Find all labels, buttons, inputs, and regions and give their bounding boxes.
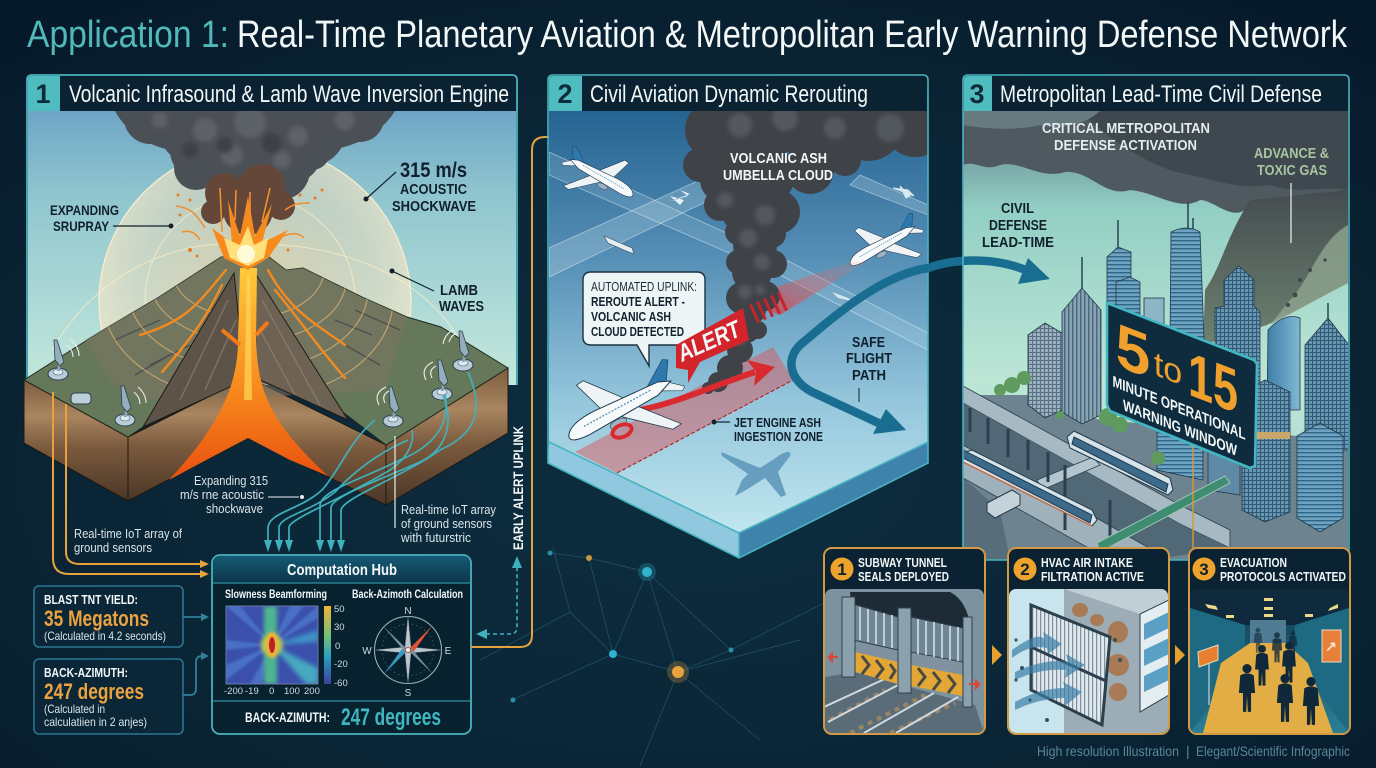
card 2: HVAC filtration: 2 [1020,560,1030,579]
volcanic ash plume [683,111,928,394]
alert banner: ALERT [673,315,747,368]
teal dashed uplink [486,566,517,634]
label: IoT array right: of ground sensors [401,516,492,531]
label: advance and toxic gas [1254,146,1329,243]
toxic cloud [963,111,1348,213]
slowness beamforming heatmap [224,589,348,697]
back-azimuth compass: E [445,646,452,657]
label: volcanic ash umbrella cloud: VOLCANIC ASH [730,151,827,167]
flight corridors [549,152,928,350]
label: safe flight path [846,334,892,402]
card 2: HVAC filtration: HVAC AIR INTAKE [1041,555,1133,570]
computation hub: Computation Hub [287,562,397,579]
lava conduit [169,268,328,480]
eruption [176,188,324,270]
label: civil defense lead-time [982,201,1054,251]
title: Application 1: [27,14,229,56]
label: jet engine ash ingestion zone [712,415,823,444]
back-azimuth compass: S [405,688,412,699]
plane shadow [721,452,791,497]
blast TNT yield box: (Calculated in 4.2 seconds) [44,629,166,643]
hub result: BACK-AZIMUTH: [245,709,330,725]
slowness beamforming heatmap: 30 [334,622,345,633]
scene: tunnel gate [824,589,984,733]
early alert uplink: EARLY ALERT UPLINK [510,426,526,550]
affected aircraft [549,341,700,473]
warning sign [1107,303,1257,468]
slowness beamforming heatmap: 0 [335,641,340,652]
scene: evacuation corridor [1190,589,1349,733]
slowness beamforming heatmap: 200 [304,686,320,697]
terrain side faces [24,380,128,501]
slowness beamforming heatmap: Slowness Beamforming [225,589,327,601]
back-azimuth box: BACK-AZIMUTH: [44,665,128,680]
header 2: 2 [557,79,573,109]
ground sensors [48,330,473,427]
mountain cross-section [143,273,245,427]
elevated rail viaducts [963,386,1230,560]
label: lamb waves: WAVES [439,299,484,315]
label: expanding acoustic shockwave: m/s rne acoustic [180,487,264,502]
blast TNT yield box: BLAST TNT YIELD: [44,592,138,607]
warning sign: WARNING WINDOW [1123,397,1238,460]
label: advance and toxic gas: TOXIC GAS [1257,163,1327,179]
hub result: 247 degrees [341,704,441,731]
header 1 [28,76,516,111]
label: expanding spray: EXPANDING [50,202,119,218]
trains [963,431,1173,526]
back-azimuth box: (Calculated in [44,702,105,716]
panel 3 frame [963,75,1349,560]
card 2: HVAC filtration [1008,548,1169,734]
slowness beamforming heatmap: -19 [245,686,259,697]
header 1: Volcanic Infrasound & Lamb Wave Inversion Engine [69,81,509,108]
gate panels [882,680,884,681]
trees [994,371,1165,465]
acoustic shockwave dome [52,162,458,385]
alert banner [673,292,788,383]
footer note: | [1186,743,1190,759]
label: jet engine ash ingestion zone: JET ENGINE ASH [734,415,821,430]
label: expanding acoustic shockwave [180,473,268,516]
back-azimuth compass: N [404,606,412,617]
card 3: evacuation protocols: PROTOCOLS ACTIVATED [1220,569,1346,584]
arrow: card 1 to 2 [992,645,1002,665]
scene: filter panel [1009,589,1169,733]
volcanic plume [115,111,395,234]
label: IoT array left [74,526,182,555]
label: expanding spray [50,202,174,234]
ground [963,395,1348,560]
card 1: subway tunnel seals: SEALS DEPLOYED [858,569,949,584]
network background decoration [480,548,830,766]
panel 3 sky [963,111,1348,560]
label: expanding acoustic shockwave: shockwave [206,501,263,516]
label: safe flight path: SAFE [852,334,885,351]
red flight path arrow [640,360,775,410]
label: safe flight path: FLIGHT [846,350,892,367]
callout: automated uplink: AUTOMATED UPLINK: [591,280,697,294]
label: advance and toxic gas: ADVANCE & [1254,146,1329,162]
blast TNT yield box [34,586,183,647]
header 2 [549,76,927,111]
arrow: card 2 to 3 [1175,645,1185,665]
warning sign: 5 [1116,309,1150,392]
label: volcanic ash umbrella cloud: UMBELLA CLOUD [723,168,833,184]
card 1: subway tunnel seals: 1 [837,560,847,579]
back-azimuth compass: W [362,646,372,657]
back-azimuth box [34,659,183,734]
slowness beamforming heatmap: -200 [224,686,243,697]
label: civil defense lead-time: DEFENSE [989,218,1047,234]
footer note: High resolution Illustration [1037,743,1179,759]
label: lamb waves: LAMB [440,283,478,299]
slowness beamforming heatmap: 100 [284,686,300,697]
computation hub [212,555,471,734]
panel 1 sky [28,111,516,385]
panel 1: volcanic infrasound engine [24,75,517,505]
safe flight path arrow [791,268,928,434]
label: critical metropolitan defense activation [1042,121,1210,154]
warning sign: MINUTE OPERATIONAL [1112,373,1246,444]
label: IoT array right [400,502,496,545]
back-azimuth box: 247 degrees [44,679,144,704]
panel 2 frame [548,75,928,558]
header 1: 1 [35,79,51,109]
panel 2: civil aviation rerouting [548,75,947,558]
label: expanding spray: SRUPRAY [53,218,110,234]
terrain top surface [24,257,508,445]
callout: automated uplink: REROUTE ALERT - [591,295,685,309]
towers [1028,202,1349,532]
panel 1 frame [27,75,517,386]
callout: automated uplink [583,272,705,366]
header 3 [964,76,1348,111]
label: critical metropolitan defense activation: CRITICAL METROPOLITAN [1042,121,1210,137]
label: civil defense lead-time: CIVIL [1001,201,1034,217]
slope creases [115,310,400,375]
lead-time arrow [928,258,1050,284]
panel 3: metropolitan civil defense [928,75,1349,560]
arrows: boxes to hub [183,613,209,695]
label: volcanic ash umbrella cloud [723,151,833,184]
hub result [245,704,441,731]
alert zones [575,262,866,473]
label: jet engine ash ingestion zone: INGESTION ZONE [734,429,823,444]
panel headers [28,76,1348,111]
lava surface streams [140,270,345,378]
label: 315 m/s acoustic shockwave: ACOUSTIC [400,182,467,198]
label: 315 m/s acoustic shockwave [364,159,476,215]
back-azimuth compass [352,589,463,699]
early alert uplink [471,130,562,647]
label: lamb waves [390,268,484,315]
label: IoT array right: Real-time IoT array [401,502,496,517]
card 2: HVAC filtration: FILTRATION ACTIVE [1041,569,1144,584]
city art [963,111,1349,560]
label: 315 m/s acoustic shockwave: SHOCKWAVE [392,199,476,215]
label: IoT array left: Real-time IoT array of [74,526,182,541]
terrain block [24,257,508,505]
footer note: Elegant/Scientific Infographic [1196,743,1350,759]
label: 315 m/s acoustic shockwave: 315 m/s [400,159,467,182]
blast TNT yield box: 35 Megatons [44,606,149,631]
card 1: subway tunnel seals [824,548,985,734]
subsurface labels [74,473,496,555]
callout: automated uplink: VOLCANIC ASH [591,310,671,324]
label: safe flight path: PATH [852,367,886,384]
back-azimuth compass: Back-Azimoth Calculation [352,589,463,601]
warning sign: 15 [1188,338,1238,427]
slowness beamforming heatmap: 0 [269,686,274,697]
footer note [1037,743,1350,759]
label: IoT array right: with futurstric [400,530,471,545]
back-azimuth box: calculatiien in 2 anjes) [44,715,147,729]
rising toxic gas [1203,190,1348,345]
ladder connector [1192,443,1194,548]
orange sensor lines [53,392,200,574]
card 3: evacuation protocols [1189,548,1350,734]
callout: automated uplink: CLOUD DETECTED [591,325,684,339]
header 2: Civil Aviation Dynamic Rerouting [590,81,868,108]
slowness beamforming heatmap: -60 [334,678,348,689]
warning sign: to [1154,345,1182,393]
sensor data lines to hub [53,372,476,578]
label: critical metropolitan defense activation: DEFENSE ACTIVATION [1054,138,1197,154]
teal sensor lines [268,372,476,544]
slowness beamforming heatmap: -20 [334,659,348,670]
plate body [549,90,928,533]
subsurface shock rings [108,278,393,385]
orange uplink line [471,137,552,647]
header 3: 3 [969,79,985,109]
scene: evacuation corridor: ↗ [1325,638,1337,654]
card 3: evacuation protocols: 3 [1199,560,1209,579]
label: expanding acoustic shockwave: Expanding 315 [194,473,268,488]
distant planes [562,146,924,300]
rails [830,690,955,733]
label: IoT array left: ground sensors [74,540,152,555]
green transit tube [1097,476,1230,552]
card 1: subway tunnel seals: SUBWAY TUNNEL [858,555,947,570]
label: civil defense lead-time: LEAD-TIME [982,235,1054,251]
slowness beamforming heatmap: 50 [334,604,345,615]
card 3: evacuation protocols: EVACUATION [1220,555,1287,570]
